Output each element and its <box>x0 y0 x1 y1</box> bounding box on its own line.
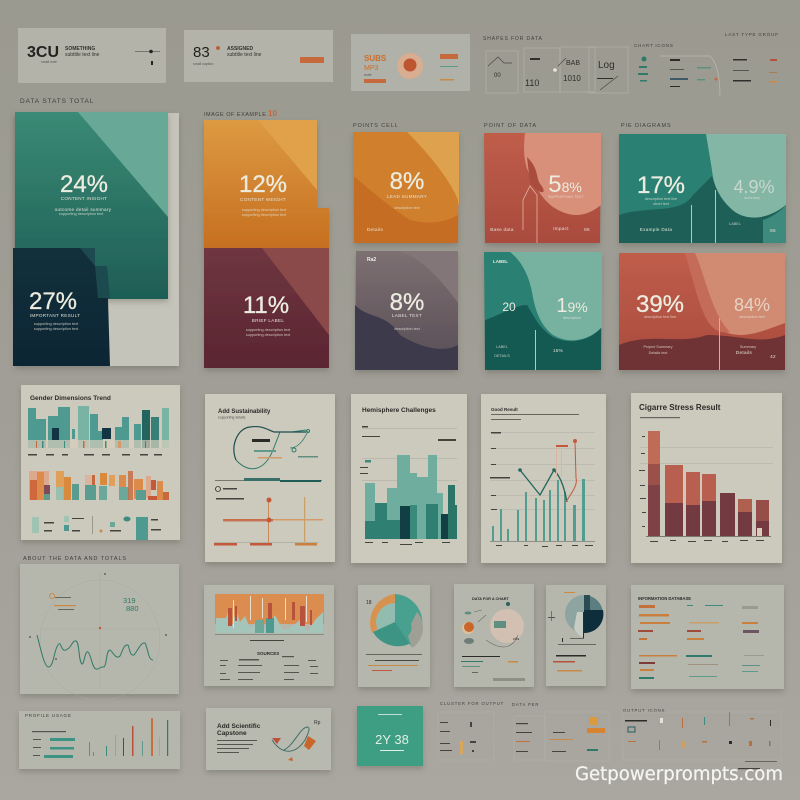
panel: outline sketch group: 00 <box>494 73 501 79</box>
panel: bottom bars and spikes <box>19 711 180 769</box>
panel: top header card 2 <box>184 30 333 82</box>
stat: 11 percent: 11% <box>243 292 289 319</box>
panel: donut chart: 18 <box>366 600 372 606</box>
chart: layered teal bars <box>365 455 457 539</box>
caption: wide teal: short text <box>653 202 670 206</box>
stat: teal number: 319 <box>123 596 136 605</box>
caption: wide teal: Example Data <box>640 227 672 232</box>
labels <box>360 426 456 474</box>
subtitle <box>491 414 579 420</box>
data markers <box>29 573 167 660</box>
panel: bottom bars and spikes: PROFILE USAGE <box>25 713 72 718</box>
panel: top header card 2: ASSIGNED <box>227 46 254 52</box>
panel: purple curved card <box>355 251 458 370</box>
caption: wide teal: LABEL <box>729 222 741 226</box>
stat: 8 percent: 8% <box>390 168 424 195</box>
caption: maroon stat <box>246 318 291 337</box>
panel: outline sketch group: Log <box>598 60 615 71</box>
grid <box>640 447 773 464</box>
chart: teal bars <box>28 406 169 448</box>
chart: stacked maroon bars <box>646 431 771 537</box>
legend <box>548 592 596 672</box>
panel: top header card 2: subtitle text line <box>227 52 262 58</box>
caption: teal stat: outcome detail summary <box>55 207 112 212</box>
panel: capital summary card: Rp <box>314 720 321 726</box>
heading: column 3: POINTS CELL <box>353 123 399 129</box>
panel: orbit diagram: DATA FOR A CHART <box>472 597 509 601</box>
caption: wide red: 42 <box>770 354 776 359</box>
title: Cigarre Stress Result <box>639 403 721 412</box>
panel: donut chart <box>358 585 430 687</box>
caption: teal curved <box>494 316 581 358</box>
panel: teal curved card: LABEL <box>493 259 508 264</box>
stat: teal number: 880 <box>126 604 139 613</box>
title: Add Scientific <box>217 723 261 730</box>
stat: right percent: 19% <box>556 295 588 317</box>
caption: navy stat: supporting description text <box>34 327 79 331</box>
caption: purple: description text <box>394 327 421 331</box>
panel: outline sketch group <box>483 32 779 96</box>
icon: curved arrow motif <box>272 727 316 761</box>
panel: orange and maroon stat card <box>204 120 329 368</box>
caption: teal curved: LABEL <box>496 345 508 349</box>
subtitle <box>640 417 680 418</box>
title: Add Sustainability <box>218 409 271 415</box>
title: Good Result <box>491 407 518 412</box>
panel: horizontal bars table: INFORMATION DATABASE <box>638 596 691 601</box>
subtitle: supporting details <box>218 416 246 420</box>
panel: teal bar report <box>351 394 467 563</box>
panel: top header card 1: small note <box>41 60 57 64</box>
panel: teal and navy stat card <box>13 112 179 366</box>
caption: orange stat: CONTENT WEIGHT <box>240 197 286 202</box>
caption: wide red: description text <box>739 315 766 319</box>
caption: wide red <box>643 315 776 359</box>
panel: orange area chart <box>204 585 334 686</box>
caption: wide teal: 86 <box>770 228 776 233</box>
panel: purple curved card: Ra2 <box>367 257 376 263</box>
caption: red card <box>490 226 590 232</box>
panel: top header card 3: note <box>364 72 373 77</box>
caption: teal curved: DETAILS <box>494 354 510 358</box>
panel: line diagram report <box>205 394 335 562</box>
body lines <box>217 740 257 753</box>
caption: red card: 86 <box>584 227 590 232</box>
panel: wide red card <box>619 253 785 370</box>
y labels <box>639 436 646 527</box>
heading: column 5: PIE DIAGRAMS <box>621 123 672 129</box>
panel: outline sketch group: 110 <box>525 78 539 88</box>
caption: red card: Base data <box>490 227 514 232</box>
chart: stacked area <box>215 594 324 635</box>
panel: orbit diagram: c0s <box>513 636 519 641</box>
chart: pale stripe band <box>28 440 169 448</box>
panel: top header card 2: small caption <box>193 62 213 66</box>
heading: lower left: ABOUT THE DATA AND TOTALS <box>23 556 127 562</box>
caption: orange curved: LEAD SUMMARY <box>387 194 427 199</box>
axis labels <box>250 640 284 641</box>
panel: outline sketch group: LAST TYPE GROUP <box>725 32 779 37</box>
panel: orange curved card: Details <box>367 227 383 232</box>
caption: purple <box>392 313 422 331</box>
panel: top header card 1 <box>18 28 166 83</box>
stat: 12 percent: 12% <box>239 171 287 198</box>
chart: wave line <box>37 635 153 669</box>
caption: wide red: Project Summary <box>643 345 673 349</box>
chart: orange bars <box>29 471 169 500</box>
label: circular marker <box>216 486 244 500</box>
panel: stacked bar report <box>21 385 180 540</box>
panel: outline sketch group: CHART ICONS <box>634 43 674 48</box>
grid <box>490 432 595 510</box>
caption: teal stat: supporting description text <box>59 212 104 216</box>
caption: orange curved: description text <box>394 206 421 210</box>
panel: outline sketch group: BAB <box>566 60 580 67</box>
caption: purple: LABEL TEXT <box>392 313 422 318</box>
panel: top header card 1: SOMETHING <box>65 46 95 52</box>
panel: bottom sketch group <box>438 701 781 769</box>
pie <box>565 595 603 638</box>
caption: orange stat: supporting description text <box>242 208 287 212</box>
panel: top header card 1: 3CU <box>27 44 59 61</box>
caption: maroon stat: supporting description text <box>246 328 291 332</box>
labels <box>28 454 162 456</box>
caption: teal curved: description <box>563 316 581 320</box>
caption: wide teal: description text line <box>645 197 677 201</box>
caption: orange curved <box>387 194 427 210</box>
title <box>217 723 261 737</box>
heading: column 1: DATA STATS TOTAL <box>20 98 94 105</box>
title: Capstone <box>217 730 247 737</box>
x labels <box>650 540 764 542</box>
caption: maroon stat: BRIEF LABEL <box>252 318 284 323</box>
panel: teal curved card <box>484 252 602 370</box>
caption: teal curved: 15% <box>553 348 563 353</box>
legend lines <box>366 654 422 671</box>
panel: red curved card <box>484 133 601 243</box>
stat: 84 percent: 84% <box>734 295 770 315</box>
chart: line overlay <box>518 439 577 502</box>
panel: top header card 3: SUBS <box>364 54 387 63</box>
stat: 4 percent: 4.9% <box>733 177 775 197</box>
panel: green stat tile <box>357 706 423 766</box>
heading: column 4: POINT OF DATA <box>484 123 537 129</box>
caption: navy stat: supporting description text <box>34 322 79 326</box>
y labels <box>490 432 510 510</box>
stat: 58 percent: 58% <box>548 171 582 198</box>
table title: SOURCES <box>257 651 279 656</box>
panel: orange curved card <box>353 132 459 243</box>
chart: loop diagram <box>234 427 318 469</box>
panel: green stat tile: 2Y 38 <box>375 732 409 747</box>
caption: wide red: Summary <box>740 345 756 349</box>
grid <box>362 428 457 480</box>
donut <box>370 594 423 648</box>
caption: wide red: Details text <box>649 351 668 355</box>
stat: 8 percent purple: 8% <box>390 289 424 316</box>
panel: capital summary card <box>206 708 331 770</box>
panel: horizontal bars table <box>631 585 784 689</box>
x labels <box>496 545 593 547</box>
title: Gender Dimensions Trend <box>30 395 111 402</box>
panel: top header card 1: subtitle text line <box>65 52 100 58</box>
panel: bottom sketch group: OUTPUT ICONS <box>623 708 665 713</box>
stat: left small number: 20 <box>502 300 516 314</box>
stat: 27 percent: 27% <box>29 288 77 315</box>
caption: wide red: description text line <box>644 315 676 319</box>
heading: column 2: IMAGE OF EXAMPLE <box>204 112 266 118</box>
panel: bottom sketch group: DATA PER <box>512 702 539 707</box>
panel: wide teal card <box>619 134 786 243</box>
stat: 39 percent: 39% <box>636 291 684 318</box>
title: Hemisphere Challenges <box>362 407 436 414</box>
watermark: Getpowerprompts.com <box>575 764 783 785</box>
panel: outline sketch group: SHAPES FOR DATA <box>483 36 543 42</box>
panel: outline sketch group: 1010 <box>563 74 581 83</box>
panel: top header card 2: 83 <box>193 44 210 61</box>
panel: line and spike report <box>481 394 606 563</box>
legend <box>32 516 161 540</box>
panel: wave chart <box>20 564 179 700</box>
chart: dark progress band <box>215 478 322 482</box>
panel: top header card 3 <box>351 34 470 91</box>
caption: navy stat <box>30 313 80 331</box>
heading: column 2: 10 <box>268 109 277 118</box>
caption: navy stat: IMPORTANT RESULT <box>30 313 80 318</box>
caption: wide teal: summary <box>744 196 760 200</box>
caption: maroon stat: supporting description text <box>246 333 291 337</box>
panel: orbit diagram <box>454 584 534 687</box>
label: orange callout <box>50 594 76 610</box>
caption: teal stat <box>55 196 112 216</box>
axis labels <box>365 542 450 545</box>
table rows <box>220 656 318 680</box>
stat: teal number <box>123 596 139 613</box>
caption: orange stat <box>240 197 287 217</box>
heading: column 2 <box>204 109 277 118</box>
caption: wide red: Details <box>736 350 752 355</box>
caption: wide teal <box>640 196 776 233</box>
stat: 24 percent: 24% <box>60 171 108 198</box>
chart: orange cross timeline <box>214 497 323 546</box>
panel: pie chart <box>546 585 606 686</box>
caption: red card: Impact <box>553 226 569 231</box>
panel: top header card 3: MP3 <box>364 65 378 72</box>
panel: maroon bar report <box>631 393 782 563</box>
caption: teal stat: CONTENT INSIGHT <box>61 196 107 201</box>
stat: 17 percent: 17% <box>637 172 685 199</box>
chart: teal spikes <box>490 479 595 542</box>
caption: orange stat: supporting description text <box>242 213 287 217</box>
panel: red curved card: SUPPORTING TEXT <box>548 195 585 199</box>
panel: bottom sketch group: CLUSTER FOR OUTPUT <box>440 701 504 706</box>
